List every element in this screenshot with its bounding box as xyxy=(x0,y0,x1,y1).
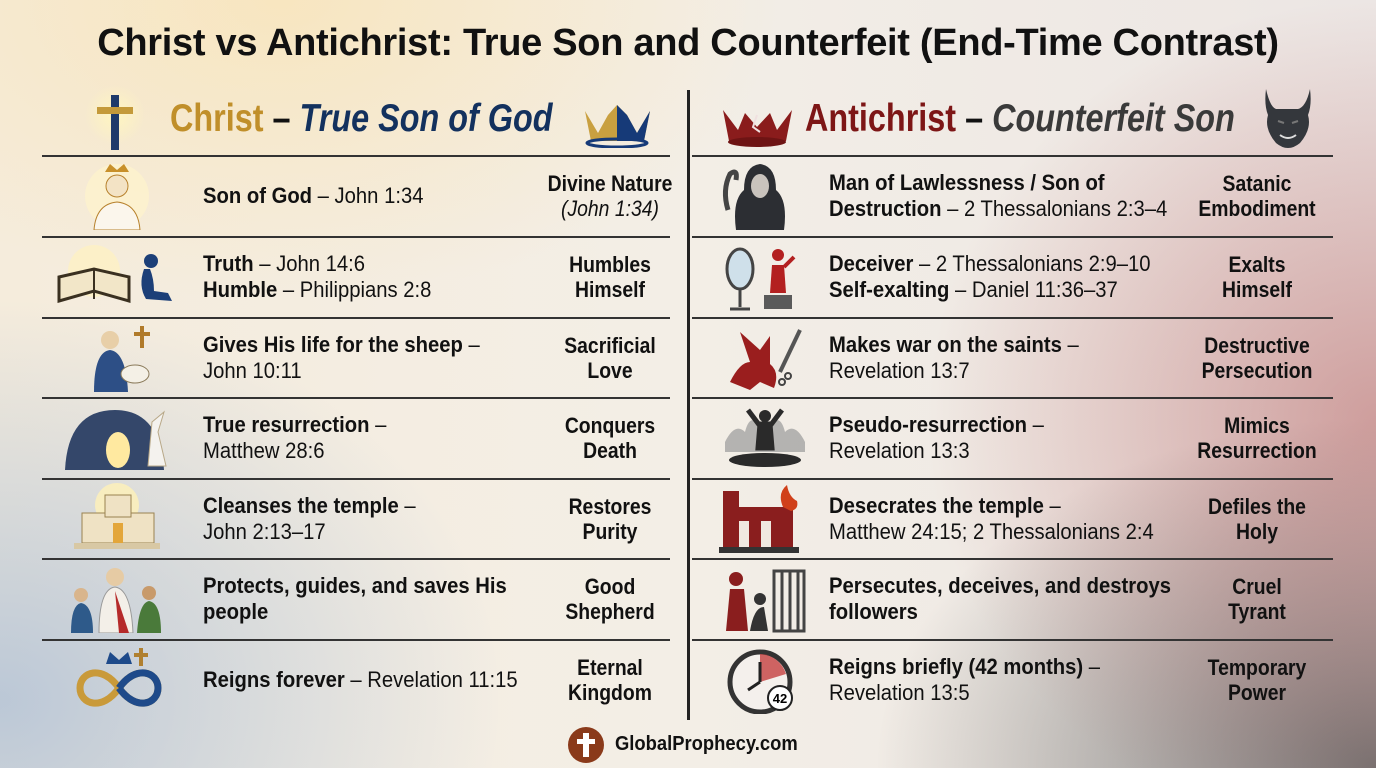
row 7 right xyxy=(692,644,1333,716)
label: Death xyxy=(583,438,637,463)
label: Eternal xyxy=(577,655,643,680)
text: Desecrates the temple – xyxy=(829,493,1061,518)
row 2 left xyxy=(58,245,651,303)
label: Defiles the xyxy=(1208,494,1306,519)
text xyxy=(829,564,1171,634)
label xyxy=(548,171,672,221)
text xyxy=(829,242,1150,312)
label: Himself xyxy=(1222,277,1292,302)
text xyxy=(829,645,1100,715)
label: Sacrificial xyxy=(564,333,656,358)
text: Makes war on the saints – xyxy=(829,332,1079,357)
text: Matthew 28:6 xyxy=(203,438,325,463)
label xyxy=(569,252,651,302)
label xyxy=(1198,171,1316,221)
text xyxy=(829,484,1154,554)
icon: crown xyxy=(585,105,650,148)
text: Self-exalting – Daniel 11:36–37 xyxy=(829,277,1118,302)
label: Satanic xyxy=(1223,171,1291,196)
text: Reigns briefly (42 months) – xyxy=(829,654,1100,679)
label xyxy=(1182,403,1332,473)
label: Himself xyxy=(575,277,645,302)
label: Conquers xyxy=(565,413,655,438)
label: Temporary xyxy=(1208,655,1306,680)
icon: broken crown xyxy=(723,110,792,147)
row 3 left xyxy=(94,326,656,392)
row 1 right xyxy=(722,164,1316,230)
row 5 left xyxy=(74,483,651,549)
label: Divine Nature xyxy=(548,171,672,196)
label xyxy=(564,333,656,383)
label: Cruel xyxy=(1232,574,1282,599)
label xyxy=(565,574,655,624)
text: Gives His life for the sheep – xyxy=(203,332,480,357)
text: Revelation 13:7 xyxy=(829,358,970,383)
icon: bible and kneeling xyxy=(58,245,172,303)
label: Love xyxy=(587,358,633,383)
label xyxy=(1182,645,1332,715)
label: Mimics xyxy=(1224,413,1290,438)
icon: hooded figure xyxy=(722,164,785,230)
icon: temple xyxy=(74,483,160,549)
icon: burning temple xyxy=(717,483,807,553)
label xyxy=(1182,323,1332,393)
label: Exalts xyxy=(1228,252,1286,277)
text: Persecutes, deceives, and destroys xyxy=(829,573,1171,598)
row lines xyxy=(42,155,670,157)
icon: jesus with people xyxy=(71,568,161,633)
text xyxy=(203,493,416,544)
row 4 right xyxy=(692,402,1333,474)
text: Son of God – John 1:34 xyxy=(203,183,423,208)
label: (John 1:34) xyxy=(561,196,659,221)
header: antichrist xyxy=(723,89,1311,148)
header: christ xyxy=(97,95,650,150)
text xyxy=(203,251,431,302)
text: Revelation 13:5 xyxy=(829,680,970,705)
text: Matthew 24:15; 2 Thessalonians 2:4 xyxy=(829,519,1154,544)
label xyxy=(1182,242,1332,312)
row 2 right xyxy=(692,241,1333,313)
icon: crowned christ xyxy=(86,164,145,230)
icon: empty tomb xyxy=(65,410,167,470)
label: Restores xyxy=(569,494,651,519)
icon: dragon xyxy=(720,322,810,392)
text: Pseudo-resurrection – xyxy=(829,412,1044,437)
row 6 right xyxy=(692,563,1333,635)
footer logo xyxy=(567,726,817,764)
icon: devil head xyxy=(1265,89,1311,148)
text: Man of Lawlessness / Son of xyxy=(829,170,1105,195)
text: people xyxy=(203,599,268,624)
label: Power xyxy=(1228,680,1286,705)
heading text: Christ – True Son of God xyxy=(170,97,553,140)
label: Kingdom xyxy=(568,680,652,705)
label xyxy=(569,494,651,544)
text: Cleanses the temple – xyxy=(203,493,416,518)
icon: clock 42 xyxy=(722,644,812,714)
row 6 left xyxy=(71,568,655,633)
label: Destructive xyxy=(1204,333,1310,358)
text xyxy=(203,412,386,463)
label: Holy xyxy=(1236,519,1278,544)
icon: logo circle xyxy=(567,726,605,764)
label: Resurrection xyxy=(1197,438,1317,463)
row 3 right xyxy=(692,322,1333,394)
icon: infinity crown xyxy=(76,648,162,707)
row 4 left xyxy=(65,410,655,470)
title: Christ vs Antichrist: True Son and Counterfeit (End-Time Contrast) xyxy=(97,22,1279,64)
label: Purity xyxy=(583,519,637,544)
text: followers xyxy=(829,599,918,624)
label: Embodiment xyxy=(1198,196,1316,221)
text: Deceiver – 2 Thessalonians 2:9–10 xyxy=(829,251,1150,276)
heading text: Antichrist – Counterfeit Son xyxy=(805,97,1235,140)
vertical divider xyxy=(687,90,690,720)
label: Persecution xyxy=(1202,358,1312,383)
label: Tyrant xyxy=(1228,599,1286,624)
icon: rising figure xyxy=(720,402,810,472)
text: John 2:13–17 xyxy=(203,519,326,544)
footer text: GlobalProphecy.com xyxy=(615,733,798,755)
text: Reigns forever – Revelation 11:15 xyxy=(203,667,518,692)
row 5 right xyxy=(692,483,1333,555)
text xyxy=(829,403,1044,473)
row 1 left xyxy=(86,164,672,230)
label: Humbles xyxy=(569,252,651,277)
icon: cross xyxy=(97,95,133,150)
row 7 left xyxy=(76,648,652,707)
label xyxy=(568,655,652,705)
text: Revelation 13:3 xyxy=(829,438,970,463)
icon: shepherd with lamb xyxy=(94,326,150,392)
icon: mirror and pedestal xyxy=(720,241,810,311)
text xyxy=(203,332,480,383)
label xyxy=(1182,484,1332,554)
text: Humble – Philippians 2:8 xyxy=(203,277,431,302)
label: Good xyxy=(585,574,635,599)
text: John 10:11 xyxy=(203,358,302,383)
text xyxy=(829,170,1167,221)
label xyxy=(1182,564,1332,634)
text: Protects, guides, and saves His xyxy=(203,573,507,598)
label: Shepherd xyxy=(565,599,655,624)
text: Destruction – 2 Thessalonians 2:3–4 xyxy=(829,196,1167,221)
text: True resurrection – xyxy=(203,412,386,437)
text xyxy=(203,573,507,624)
text: Truth – John 14:6 xyxy=(203,251,365,276)
text xyxy=(829,323,1079,393)
icon: clock 42: 42 xyxy=(773,691,787,706)
icon: tyrant and prison xyxy=(720,563,810,633)
label xyxy=(565,413,655,463)
